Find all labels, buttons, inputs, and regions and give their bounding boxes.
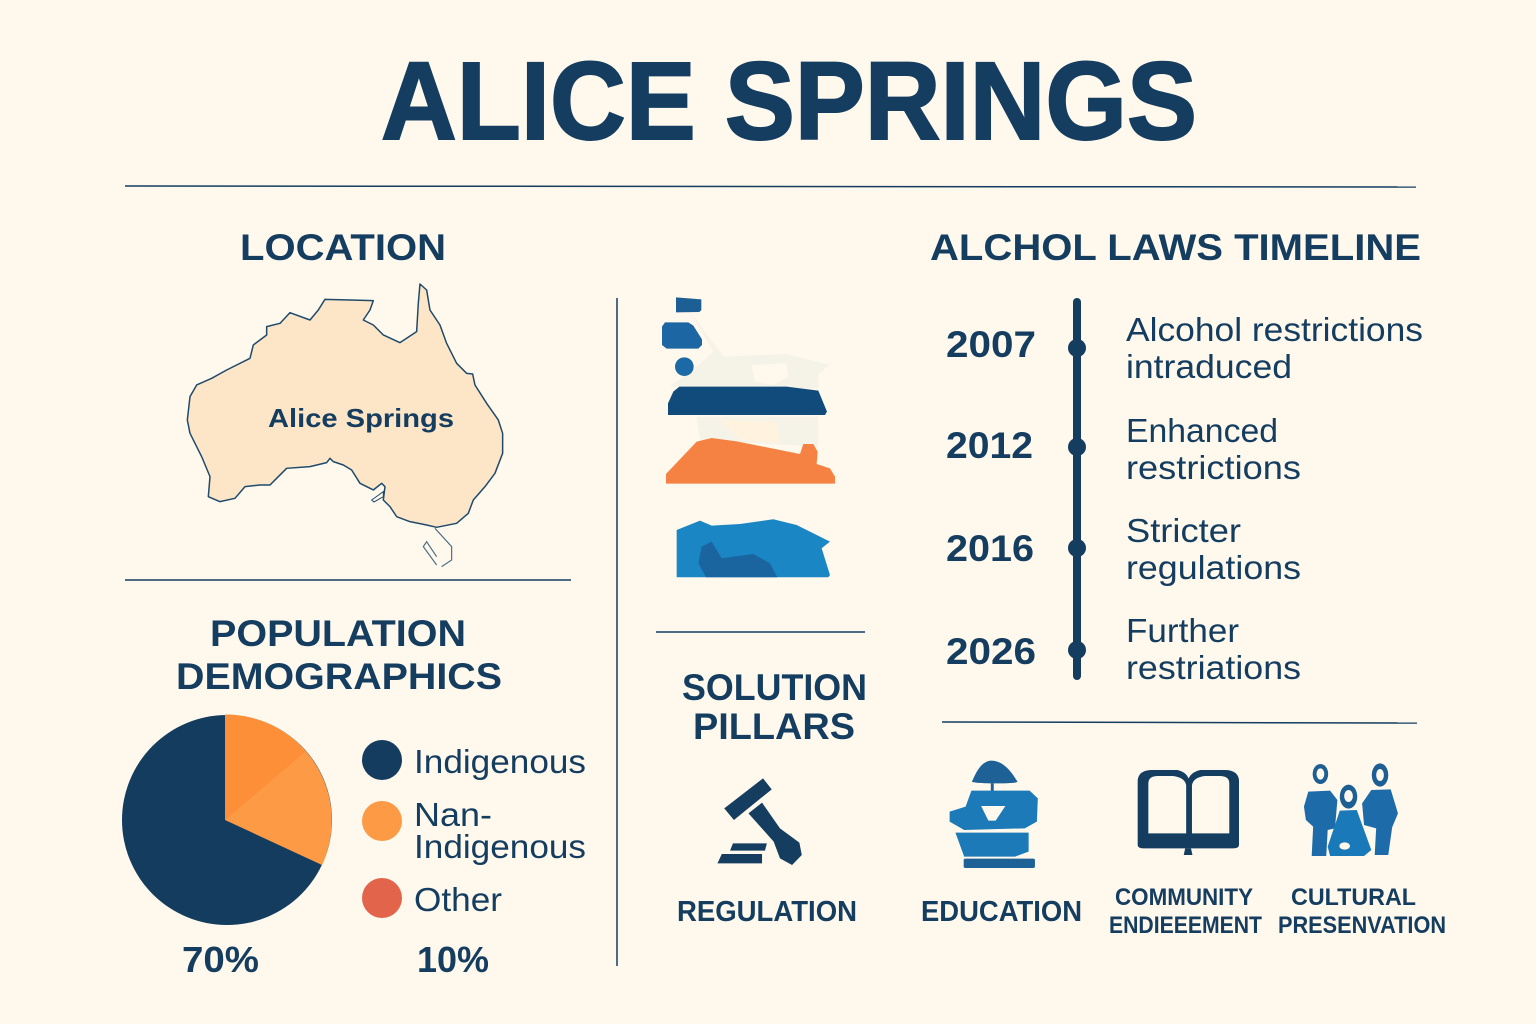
icon: gavel bbox=[717, 778, 802, 865]
entry 2012: restrictions bbox=[1126, 449, 1301, 486]
entry 2026: restriations bbox=[1126, 649, 1301, 686]
legend: other: Other bbox=[414, 881, 502, 918]
label: cultural preservation: CULTURAL bbox=[1291, 884, 1416, 911]
label: community engagement: ENDIEEEMENT bbox=[1109, 912, 1262, 939]
navy bar bbox=[668, 387, 827, 415]
entry 2007 bbox=[946, 311, 1423, 385]
orange shape bbox=[666, 438, 835, 484]
heading: solution pillars: SOLUTION bbox=[682, 667, 867, 708]
icon: family group bbox=[1304, 763, 1398, 856]
center figure bbox=[1328, 785, 1371, 856]
timeline axis bbox=[1068, 302, 1086, 676]
legend: non-indigenous: Indigenous bbox=[414, 828, 586, 865]
legend: indigenous: Indigenous bbox=[414, 743, 586, 780]
entry 2026: Further bbox=[1126, 612, 1239, 649]
heading: population demographics bbox=[176, 613, 502, 697]
entry 2007: intraduced bbox=[1126, 348, 1292, 385]
entry 2012: 2012 bbox=[946, 425, 1033, 466]
stat: 70%: 70% bbox=[182, 939, 259, 980]
entry 2012 bbox=[946, 412, 1301, 486]
label: education: EDUCATION bbox=[921, 896, 1082, 928]
heading: location: LOCATION bbox=[240, 227, 446, 268]
stat: 10%: 10% bbox=[417, 939, 489, 980]
timeline bbox=[946, 302, 1423, 686]
legend bbox=[362, 740, 586, 918]
heading: solution pillars: PILLARS bbox=[693, 706, 855, 747]
icon: education bbox=[950, 761, 1038, 868]
label: regulation: REGULATION bbox=[677, 896, 857, 928]
label: cultural preservation: PRESENVATION bbox=[1278, 912, 1446, 939]
label: cultural preservation bbox=[1278, 884, 1446, 939]
label: community engagement bbox=[1109, 884, 1262, 939]
entry 2012: Enhanced bbox=[1126, 412, 1278, 449]
left figure bbox=[1304, 764, 1337, 856]
entry 2026: 2026 bbox=[946, 631, 1036, 672]
blue rounded block bbox=[662, 322, 702, 349]
entry 2016: Stricter bbox=[1126, 512, 1241, 549]
title: ALICE SPRINGS bbox=[381, 40, 1197, 163]
illustration: abstract stacked shapes bbox=[662, 297, 835, 577]
map label: Alice Springs bbox=[268, 403, 454, 433]
heading: population demographics: DEMOGRAPHICS bbox=[176, 656, 502, 697]
heading: population demographics: POPULATION bbox=[210, 613, 466, 654]
entry 2016: regulations bbox=[1126, 549, 1301, 586]
blue dot bbox=[675, 357, 694, 376]
blue landscape shape bbox=[677, 519, 830, 577]
icon: open book bbox=[1138, 770, 1239, 855]
legend: indigenous bbox=[362, 740, 586, 780]
heading: alcohol laws timeline: ALCHOL LAWS TIMELINE bbox=[930, 227, 1421, 268]
label: community engagement: COMMUNITY bbox=[1115, 884, 1253, 911]
map: Australia with Alice Springs label bbox=[187, 284, 503, 567]
faded background shape bbox=[670, 312, 830, 388]
entry 2007: Alcohol restrictions bbox=[1126, 311, 1423, 348]
top blue tab bbox=[676, 297, 701, 312]
legend: other bbox=[362, 878, 502, 918]
legend: non-indigenous bbox=[362, 796, 586, 865]
pie chart bbox=[122, 714, 332, 925]
entry 2007: 2007 bbox=[946, 324, 1036, 365]
entry 2016 bbox=[946, 512, 1301, 586]
map outline bbox=[187, 284, 503, 567]
heading: solution pillars bbox=[682, 667, 867, 747]
legend: non-indigenous: Nan- bbox=[414, 796, 492, 833]
entry 2016: 2016 bbox=[946, 528, 1034, 569]
entry 2026 bbox=[946, 612, 1301, 686]
right figure bbox=[1362, 763, 1398, 855]
